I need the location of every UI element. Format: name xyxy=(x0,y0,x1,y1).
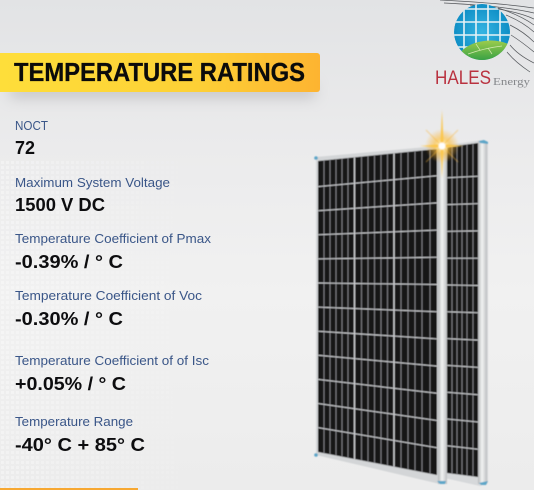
back panel xyxy=(446,140,488,486)
blue frame corners xyxy=(314,140,488,485)
spec: Temperature Range xyxy=(15,415,145,455)
bottom orange strip xyxy=(0,488,138,490)
spec: Voc coefficient xyxy=(15,289,202,329)
spec: Isc coefficient: +0.05% / ° C xyxy=(15,374,126,394)
title bar xyxy=(0,53,320,92)
solar panels xyxy=(314,140,488,486)
spec: Voc coefficient: -0.30% / ° C xyxy=(15,309,123,329)
spec: Pmax coefficient: -0.39% / ° C xyxy=(15,252,123,272)
logo: Hales Energy xyxy=(435,0,534,89)
spec: Isc coefficient: Temperature Coefficient of of Isc xyxy=(15,354,209,368)
spec: Maximum System Voltage: 1500 V DC xyxy=(15,195,105,215)
spec: Maximum System Voltage: Maximum System Voltage xyxy=(15,176,170,190)
wordmark HALES: HALES xyxy=(435,67,491,89)
sun flare xyxy=(420,110,464,178)
title shadow xyxy=(10,84,315,98)
spec: NOCT: 72 xyxy=(15,138,35,158)
spec: Isc coefficient xyxy=(15,354,209,394)
solar globe xyxy=(454,4,510,60)
spec: Pmax coefficient: Temperature Coefficient of Pmax xyxy=(15,232,212,246)
spec: NOCT: NOCT xyxy=(15,119,48,133)
spec: Voc coefficient: Temperature Coefficient of Voc xyxy=(15,289,202,303)
spec: Temperature Range: Temperature Range xyxy=(15,415,133,429)
spec: Temperature Range: -40° C + 85° C xyxy=(15,435,145,455)
spec: Pmax coefficient xyxy=(15,232,212,272)
fan lines xyxy=(440,0,534,72)
dot pattern xyxy=(0,160,210,490)
title: TEMPERATURE RATINGS xyxy=(14,59,305,87)
wordmark Energy: Energy xyxy=(493,77,531,88)
front panel xyxy=(316,146,447,484)
spec: Maximum System Voltage xyxy=(15,176,170,215)
spec: NOCT xyxy=(15,119,48,158)
